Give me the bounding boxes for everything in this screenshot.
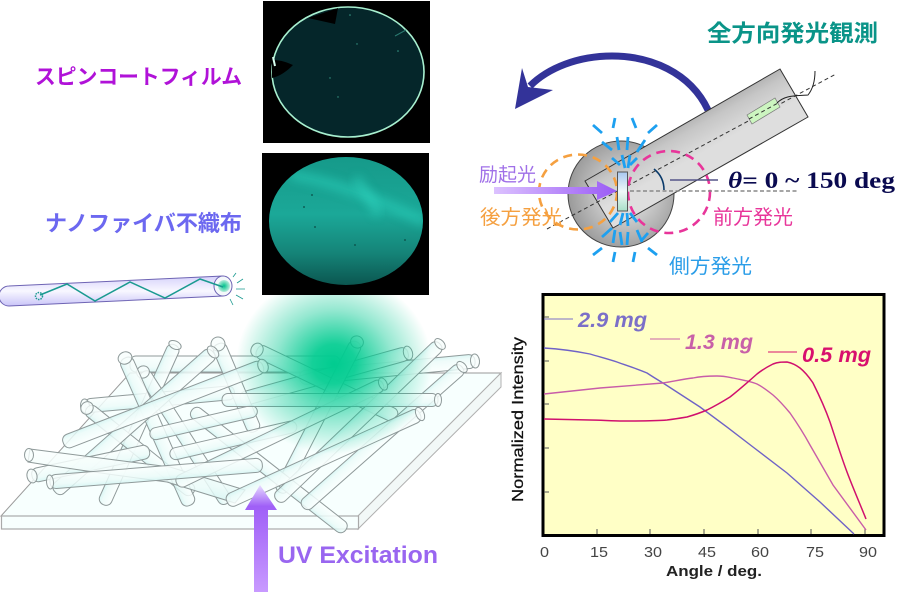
photo: nanofiber non-woven — [262, 153, 429, 295]
nanofiber mat — [24, 334, 480, 535]
angle arc — [654, 169, 664, 190]
leader: 2.9 mg — [544, 318, 573, 320]
glass substrate — [1, 373, 501, 529]
heading: omnidirectional emission: 全方向発光観測 — [707, 20, 878, 46]
x axis title: Angle / deg. — [666, 563, 762, 580]
rotation arrow — [515, 56, 708, 110]
heading: nanofiber non-woven: ナノファイバ不織布 — [45, 211, 242, 236]
backward emission dashed circle — [539, 154, 617, 230]
forward emission dashed circle — [628, 151, 710, 233]
rotating stage — [547, 69, 836, 247]
green emission glow — [236, 274, 432, 454]
curve: 2.9 mg — [544, 348, 854, 534]
side emission rays — [593, 118, 657, 262]
x tick labels: 15 — [590, 545, 608, 561]
fiber light-guide schematic — [0, 273, 245, 306]
label: 0.5 mg: 0.5 mg — [802, 344, 871, 367]
UV excitation arrow — [245, 485, 277, 592]
x tick labels: 60 — [751, 545, 769, 561]
label: forward emission: 前方発光 — [713, 206, 793, 229]
x tick labels: 90 — [859, 545, 877, 561]
sample — [618, 172, 628, 211]
angle leader — [670, 179, 718, 181]
curve: 1.3 mg — [544, 376, 866, 530]
label: excitation light: 励起光 — [479, 164, 536, 186]
angle label: θ= 0 ~ 150 deg — [728, 168, 896, 193]
label: 1.3 mg: 1.3 mg — [685, 331, 753, 354]
excitation arrow — [494, 181, 617, 200]
heading: spin-coat film: スピンコートフィルム — [35, 66, 242, 89]
chart — [510, 294, 884, 580]
reference axis — [630, 190, 797, 192]
UV excitation label: UV Excitation — [278, 542, 438, 569]
photo: spin-coat film — [263, 1, 430, 143]
leader: 0.5 mg — [768, 351, 797, 353]
x tick labels: 30 — [644, 545, 662, 561]
x tick labels: 75 — [806, 545, 824, 561]
x tick labels: 45 — [698, 545, 716, 561]
y axis title: Normalized Intensity — [510, 337, 527, 502]
label: side emission: 側方発光 — [669, 255, 752, 278]
curve: 0.5 mg — [544, 362, 866, 519]
label: 2.9 mg: 2.9 mg — [577, 309, 647, 332]
leader: 1.3 mg — [650, 338, 680, 340]
label: backward emission: 後方発光 — [480, 206, 562, 229]
x tick labels — [540, 545, 877, 561]
x tick labels: 0 — [540, 545, 549, 561]
